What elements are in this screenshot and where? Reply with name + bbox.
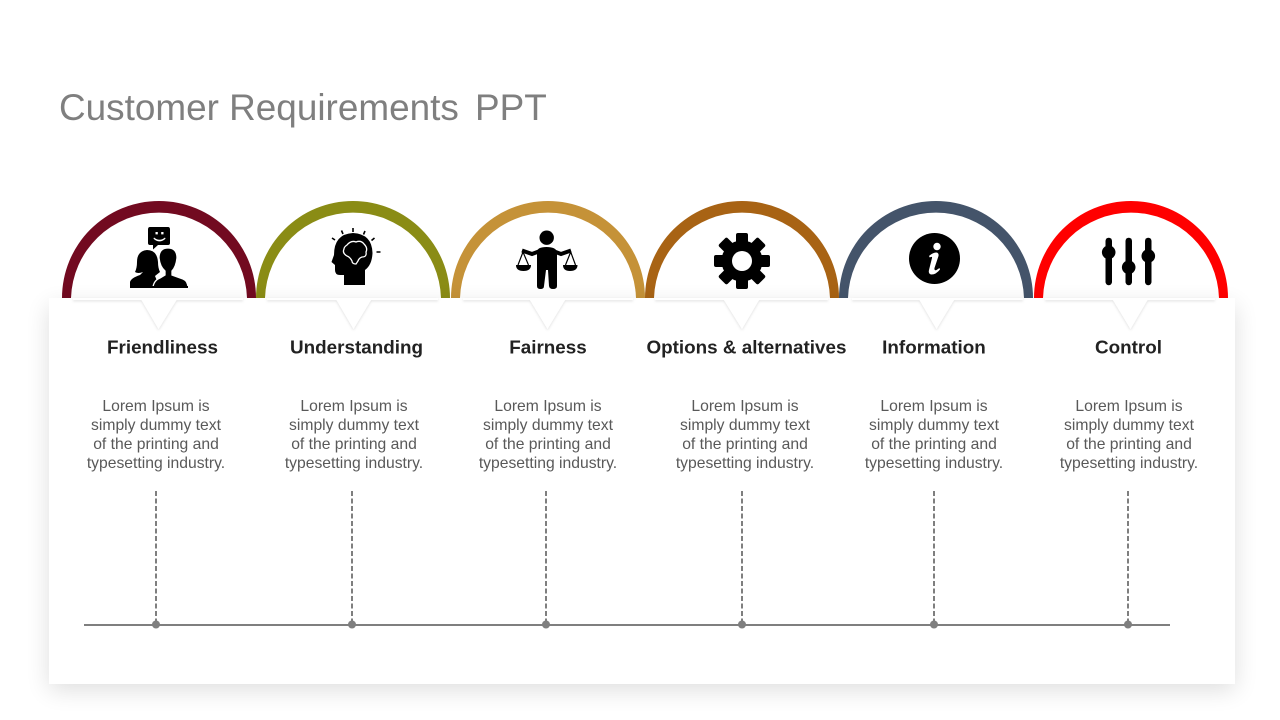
column: information text: of the printing and: [871, 436, 997, 453]
column: information text: typesetting industry.: [865, 455, 1003, 472]
icon: information: [909, 233, 960, 284]
title: PPT: [475, 87, 547, 128]
column: options text: Options & alternatives: [646, 336, 847, 358]
callout pointers: [73, 298, 1215, 329]
callout: options: [655, 298, 828, 329]
column: control text: of the printing and: [1066, 436, 1192, 453]
column: friendliness text: simply dummy text: [91, 417, 222, 434]
column: information text: Information: [882, 336, 986, 358]
column: options text: simply dummy text: [680, 417, 811, 434]
column: fairness text: simply dummy text: [483, 417, 614, 434]
column: fairness text: Lorem Ipsum is: [494, 398, 602, 415]
column: understanding text: [285, 336, 423, 472]
icon: gear: [714, 233, 770, 289]
column: control text: typesetting industry.: [1060, 455, 1198, 472]
icon: fairness: [516, 230, 578, 289]
ring: options: [645, 201, 839, 298]
column: friendliness text: typesetting industry.: [87, 455, 225, 472]
column: control text: simply dummy text: [1064, 417, 1195, 434]
ring: understanding: [256, 201, 450, 298]
ring: information: [839, 201, 1033, 298]
callout: friendliness: [73, 298, 243, 329]
column: understanding text: simply dummy text: [289, 417, 420, 434]
ring: friendliness: [62, 201, 256, 298]
column: information text: [865, 336, 1003, 472]
ring arcs: [62, 201, 1228, 298]
ring: fairness: [451, 201, 645, 298]
column: fairness text: of the printing and: [485, 436, 611, 453]
column: understanding text: Lorem Ipsum is: [300, 398, 408, 415]
column: understanding text: of the printing and: [291, 436, 417, 453]
column: control text: [1060, 336, 1198, 472]
column: understanding text: typesetting industry.: [285, 455, 423, 472]
column: fairness text: [479, 336, 617, 472]
column: information text: Lorem Ipsum is: [880, 398, 988, 415]
column: fairness text: typesetting industry.: [479, 455, 617, 472]
column: options text: typesetting industry.: [676, 455, 814, 472]
column: control text: Lorem Ipsum is: [1075, 398, 1183, 415]
callout: understanding: [267, 298, 438, 329]
column: friendliness text: [87, 336, 225, 472]
column: information text: simply dummy text: [869, 417, 1000, 434]
column: friendliness text: Lorem Ipsum is: [102, 398, 210, 415]
timeline: [84, 491, 1170, 628]
column: understanding text: Understanding: [290, 336, 423, 358]
column: options text: [646, 336, 847, 472]
title: Customer Requirements: [59, 87, 459, 128]
column: options text: of the printing and: [682, 436, 808, 453]
callout: information: [852, 298, 1023, 329]
icon: understanding: [332, 228, 380, 285]
column: options text: Lorem Ipsum is: [691, 398, 799, 415]
callout: fairness: [463, 298, 633, 329]
panel shadow: [49, 306, 1235, 690]
column: fairness text: Fairness: [509, 336, 587, 358]
ring: control: [1034, 201, 1228, 298]
panel: [49, 298, 1235, 684]
icon: friendliness: [130, 227, 188, 288]
callout: control: [1045, 298, 1215, 329]
icon: control sliders: [1102, 238, 1155, 285]
column: friendliness text: Friendliness: [107, 336, 218, 358]
column: control text: Control: [1095, 336, 1162, 358]
column: friendliness text: of the printing and: [93, 436, 219, 453]
